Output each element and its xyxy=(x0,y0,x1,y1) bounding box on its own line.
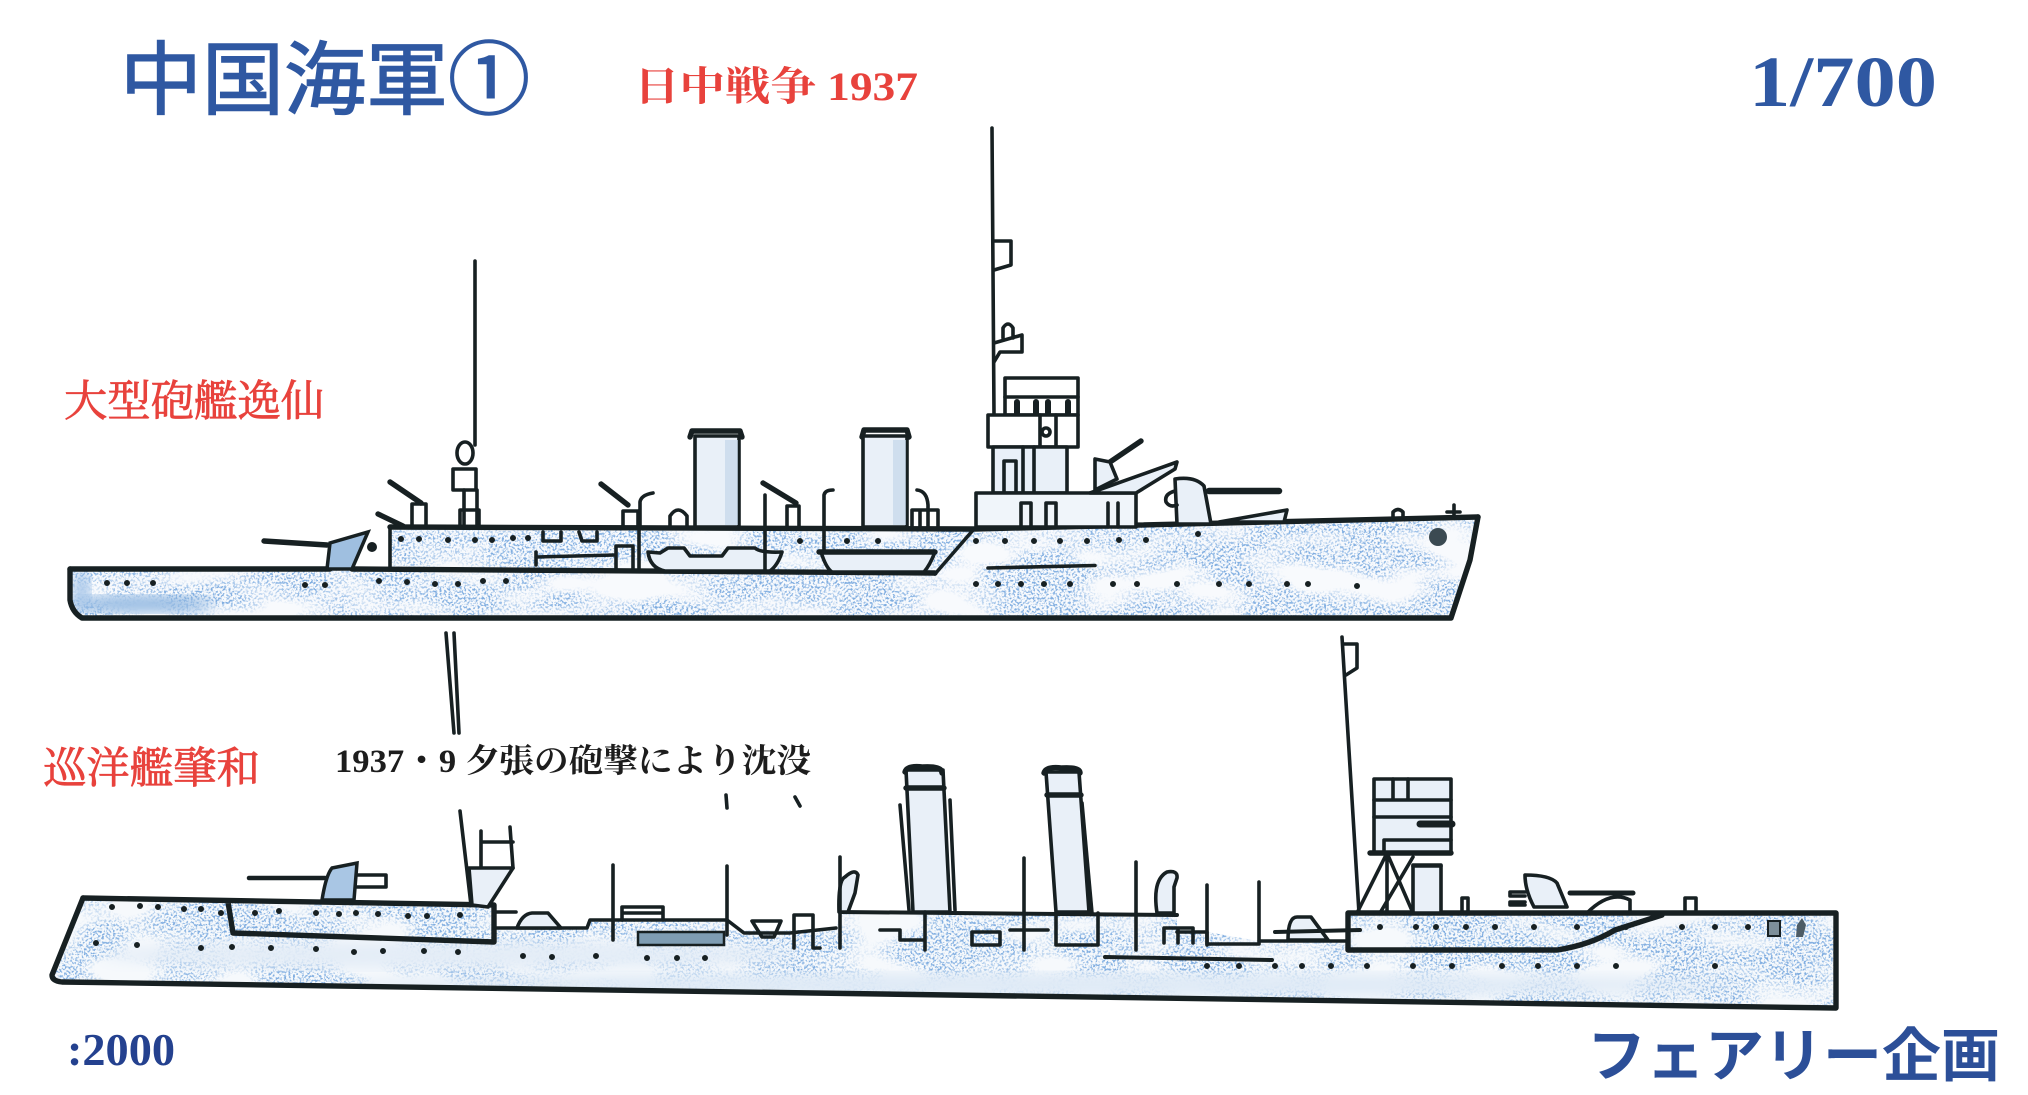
forward main gun xyxy=(1166,478,1287,524)
stern gun xyxy=(249,863,386,900)
bow fittings xyxy=(1393,505,1460,546)
bow fittings xyxy=(1685,898,1806,937)
subtitle: 日中戦争 1937 xyxy=(634,64,918,109)
main mast xyxy=(992,128,1022,415)
boat 1 xyxy=(648,548,782,571)
portholes xyxy=(107,534,1357,586)
ship drawing: cruiser Zhaohe xyxy=(45,633,1845,1015)
funnel 1 xyxy=(690,431,742,527)
fore mast xyxy=(1342,637,1359,913)
hull xyxy=(45,890,1845,1015)
ship drawing: gunboat Yat-sen xyxy=(60,128,1490,625)
aft mast broken upper section xyxy=(446,633,459,733)
bridge xyxy=(1357,779,1468,913)
boat 2 xyxy=(819,552,935,572)
midship gun 2 xyxy=(763,483,799,571)
deck fittings xyxy=(536,527,639,571)
funnel 1 xyxy=(900,767,955,912)
aft mast xyxy=(453,261,479,527)
stern gun xyxy=(264,532,377,569)
title: 中国海軍① xyxy=(120,36,530,125)
maker name: フェアリー企画 xyxy=(1587,1024,2000,1089)
ventilator aft xyxy=(839,872,858,912)
ship label: Zhaohe: 巡洋艦肇和 xyxy=(43,745,260,793)
midship gun xyxy=(1275,917,1360,940)
deck hump and fittings xyxy=(494,795,820,948)
aft deck guns xyxy=(378,482,426,527)
bridge xyxy=(976,378,1136,527)
funnel 2 xyxy=(824,430,938,552)
forward upper gun xyxy=(1090,441,1177,493)
midship fittings xyxy=(880,858,1098,950)
scale label: 1/700 xyxy=(1749,42,1937,122)
midship gun xyxy=(601,484,687,527)
ship label: Yat-sen: 大型砲艦逸仙 xyxy=(64,379,324,426)
annotation: sinking note: 1937・9 夕張の砲撃により沈没 xyxy=(335,743,811,780)
aft mast xyxy=(460,811,513,907)
portholes xyxy=(96,906,1748,966)
forward ventilators and posts xyxy=(1136,862,1259,950)
forward gun xyxy=(1510,875,1633,913)
hull xyxy=(60,510,1490,625)
scale ratio: :2000 xyxy=(67,1024,175,1075)
funnel 2 xyxy=(1044,768,1092,913)
